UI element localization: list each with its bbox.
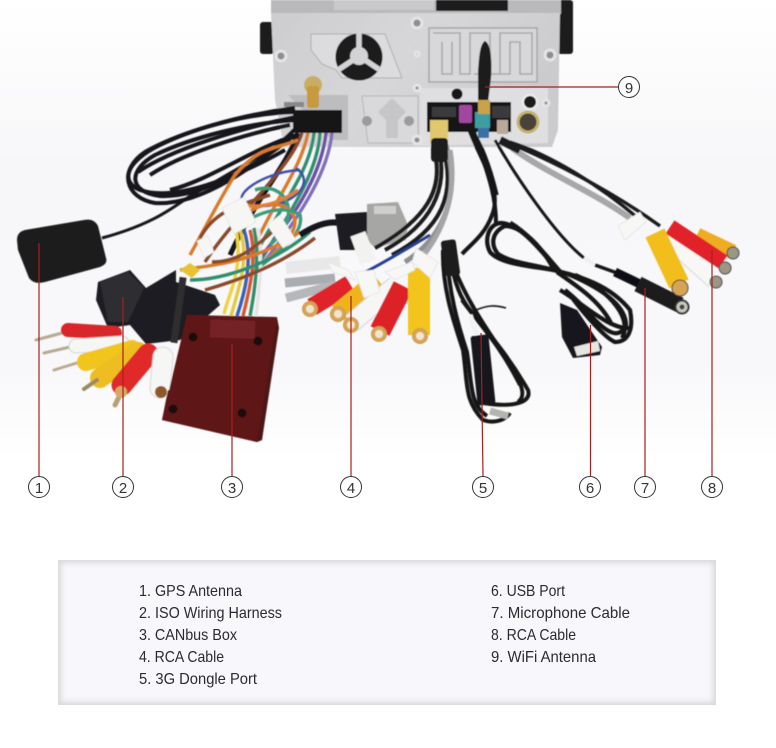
USB port cable — [470, 128, 631, 358]
callout 8 — [702, 250, 722, 498]
callout 5: 5 — [479, 480, 487, 497]
callout 4: 4 — [347, 480, 355, 497]
harness labels — [197, 197, 296, 258]
callout 7: 7 — [641, 480, 649, 497]
3G dongle cable — [441, 124, 529, 422]
screws — [276, 18, 555, 144]
microphone cable — [495, 140, 688, 314]
photo background — [0, 0, 776, 540]
callout 5 — [472, 333, 494, 498]
legend left column: 4. RCA Cable — [139, 649, 224, 666]
legend panel — [58, 560, 716, 705]
product photo — [17, 0, 739, 442]
callout 1 — [28, 243, 50, 498]
icon: fan vent — [336, 33, 382, 80]
legend left column: 2. ISO Wiring Harness — [139, 605, 282, 622]
callout 2: 2 — [119, 480, 127, 497]
RCA cable plugs centre — [285, 248, 438, 344]
callout 2 — [112, 297, 134, 498]
callout 6: 6 — [586, 480, 594, 497]
ISO wiring harness connector — [96, 263, 220, 344]
legend right column — [491, 583, 630, 666]
wiring harness — [180, 110, 345, 316]
callout 3 — [222, 344, 242, 498]
callout 9 — [485, 76, 640, 98]
icon: GPS antenna puck — [17, 220, 106, 283]
callout 4 — [340, 296, 362, 498]
callout 6 — [580, 325, 600, 498]
callout 7 — [634, 288, 656, 498]
grey connector — [335, 202, 408, 265]
legend left column — [139, 583, 282, 688]
RCA cable right — [500, 140, 739, 296]
legend left column: 5. 3G Dongle Port — [139, 671, 258, 688]
CANbus box — [162, 315, 279, 442]
icon: wifi antenna — [478, 41, 491, 114]
gold SMA connector — [284, 76, 322, 108]
legend right column: 7. Microphone Cable — [491, 605, 630, 622]
legend right column: 6. USB Port — [491, 583, 565, 600]
callout 3: 3 — [228, 480, 236, 497]
heat sink ribs — [429, 28, 537, 82]
legend left column: 3. CANbus Box — [139, 627, 237, 644]
legend left column: 1. GPS Antenna — [139, 583, 242, 600]
rear connector block — [427, 88, 538, 144]
callout 9: 9 — [625, 80, 633, 97]
RCA plugs left — [36, 330, 167, 405]
cables to RCA bundle — [360, 138, 452, 275]
head unit rear chassis — [260, 0, 573, 147]
black GPS cable coil — [102, 108, 300, 238]
legend right column: 9. WiFi Antenna — [491, 649, 596, 666]
legend right column: 8. RCA Cable — [491, 627, 576, 644]
callout 1: 1 — [35, 480, 43, 497]
callout 8: 8 — [708, 480, 716, 497]
